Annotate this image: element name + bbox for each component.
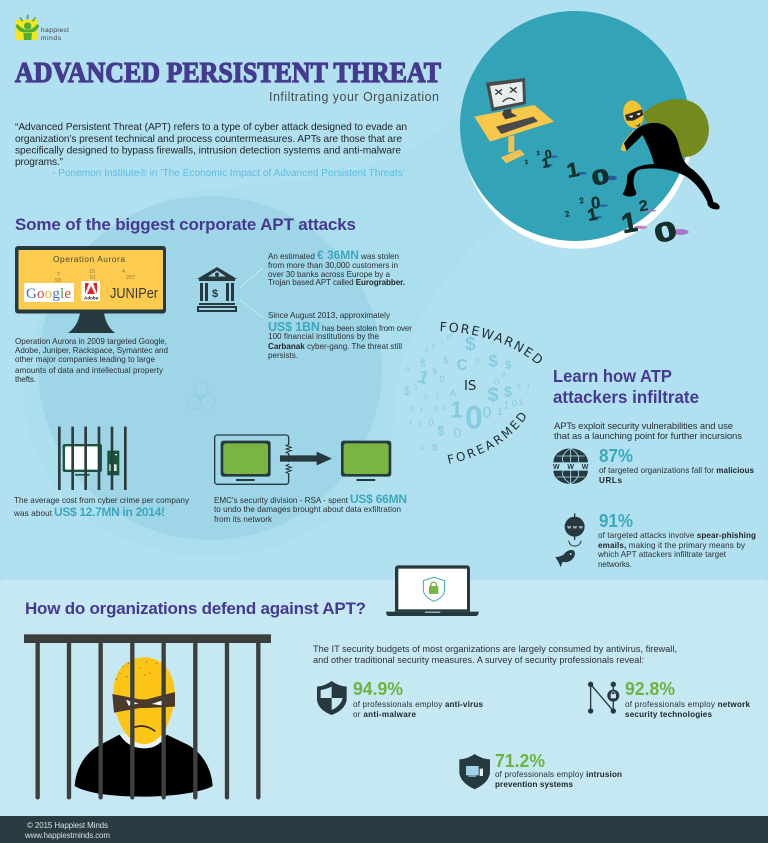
Aurora description: thefts. — [15, 375, 36, 384]
stat: 91%: 91% — [599, 511, 633, 531]
stat: Eurograbber: An estimated € 36MN was stolen — [268, 248, 399, 262]
falling digits: 2 — [564, 208, 571, 219]
graphic: forewarned is forearmed: A — [420, 445, 425, 452]
stat: 91% — [597, 511, 756, 569]
graphic: forewarned is forearmed: 4 — [425, 348, 429, 354]
icon: Operation Aurora monitor: 93 — [55, 278, 61, 284]
stat: Carbanak: US$ 1BN has been stolen from over — [268, 320, 412, 334]
graphic: forewarned is forearmed: 1 — [418, 420, 422, 429]
intro text: APTs exploit: APTs exploit security vulnerabilities and use — [554, 421, 733, 432]
intro text: APTs exploit: that as a launching point for further incursions — [554, 431, 742, 442]
graphic: forewarned is forearmed: 0 — [512, 399, 518, 410]
section heading: learn how: attackers infiltrate — [553, 387, 699, 407]
quote text block: - Ponemon Institute® in ‘The Economic Impact of Advanced Persistent Threats’ — [52, 168, 405, 179]
stat: EMC RSA: US$ 66MN — [350, 492, 407, 506]
icon: Operation Aurora monitor: 4 — [122, 269, 125, 275]
graphic: forewarned is forearmed: 0 — [424, 392, 429, 401]
graphic: forewarned is forearmed: 0 — [465, 399, 483, 435]
stat: average cost: was about — [13, 509, 53, 518]
stat: Carbanak — [268, 311, 412, 360]
intro text: APTs exploit — [554, 421, 742, 442]
graphic: forewarned is forearmed: $ — [420, 359, 426, 370]
icon: shield anti-virus — [317, 681, 347, 715]
intro text: security budgets: and other traditional security measures. A survey of security professionals reveal: — [313, 655, 644, 665]
falling digits: 1 — [565, 159, 581, 182]
logo: happiest — [41, 27, 69, 34]
quote text block: programs.” — [15, 157, 64, 168]
quote text block: “Advanced Persistent Threat (APT) refers to a type of cyber attack designed to evade an — [15, 122, 407, 133]
graphic: forewarned is forearmed: IS — [464, 379, 476, 394]
icon: network security — [588, 682, 619, 714]
stat: 94.9% — [353, 679, 483, 719]
falling digits: 2 — [536, 151, 541, 157]
graphic: forewarned is forearmed: 0 — [483, 404, 491, 421]
graphic: forewarned is forearmed: 1 — [497, 406, 503, 418]
falling digits: 1 — [541, 155, 551, 171]
stat: Eurograbber: from more than 30,000 customers in — [268, 261, 398, 270]
icon: Operation Aurora monitor: 257 — [126, 275, 135, 281]
graphic: forewarned is forearmed: 1 — [450, 396, 463, 422]
panel: defense section — [0, 565, 768, 816]
stat: Eurograbber — [268, 248, 405, 287]
graphic: forewarned is forearmed: 0 — [439, 375, 445, 386]
falling digits: 2 — [578, 195, 585, 206]
icon: Operation Aurora monitor: Google — [26, 286, 71, 302]
falling digits: 1 — [586, 204, 599, 225]
graphic: forewarned is forearmed: FOREARMED — [448, 412, 526, 464]
graphic: forewarned is forearmed: 1 — [527, 382, 531, 389]
stat: 87%: of targeted organizations fall for malicious — [599, 466, 754, 475]
icon: bank — [197, 267, 237, 312]
graphic: forewarned is forearmed: S — [432, 443, 438, 453]
stat: Carbanak: Carbanak cyber-gang. The threat still — [268, 342, 402, 351]
stat: Carbanak: 100 financial institutions by the — [268, 332, 379, 341]
icon: www globe: WWW — [553, 464, 589, 471]
icon: biohazard watermark — [187, 383, 215, 409]
icon: phishing hook and fish: www — [566, 525, 583, 530]
graphic: forewarned is forearmed: 1 — [440, 338, 444, 345]
stat: Carbanak: Since August 2013, approximately — [268, 311, 391, 320]
icon: shield with devices — [459, 754, 490, 789]
graphic: forewarned is forearmed: 0 — [502, 370, 506, 379]
graphic: forewarned is forearmed — [404, 322, 542, 464]
graphic: forewarned is forearmed: 0 — [428, 417, 434, 427]
icon: Operation Aurora monitor: 7 — [57, 272, 60, 278]
section heading: learn how — [553, 366, 699, 407]
thief figure — [621, 99, 720, 209]
title: ADVANCED PERSISTENT THREAT — [15, 58, 441, 89]
graphic: forewarned is forearmed: 0 — [433, 405, 437, 414]
icon: sack of data — [643, 99, 709, 157]
graphic: forewarned is forearmed: $ — [465, 334, 476, 355]
stat: 92.8%: security technologies — [625, 710, 712, 719]
graphic: forewarned is forearmed: $ — [488, 352, 498, 371]
icon: Operation Aurora monitor: 51 — [90, 275, 96, 281]
stat: 91%: of targeted attacks involve spear-phishing — [598, 531, 756, 540]
stat: 94.9%: or anti-malware — [353, 710, 416, 719]
stat: EMC RSA: from its network — [214, 515, 273, 524]
stat: 71.2%: of professionals employ intrusion — [495, 770, 622, 779]
subtitle: Infiltrating your Organization — [269, 90, 439, 104]
stat: 91%: emails, making it the primary means by — [598, 541, 746, 550]
graphic: forewarned is forearmed: $ — [443, 355, 449, 365]
falling digits: 1 — [619, 206, 640, 239]
stat: 92.8%: of professionals employ network — [625, 700, 750, 709]
stat: Carbanak: persists. — [268, 351, 298, 360]
footer: © 2015 Happiest Minds — [27, 821, 108, 830]
graphic: forewarned is forearmed: FOREWARNED — [440, 322, 542, 364]
stat: Eurograbber: over 30 banks across Europe by a — [268, 270, 390, 279]
falling digits: 0 — [651, 215, 680, 249]
icon: data exfiltration monitors — [215, 435, 391, 484]
quote text block: organization's present technical and process countermeasures. APTs are those that are — [15, 134, 402, 145]
quote text block: specifically designed to bypass firewalls, intrusion detection systems and anti-malware — [15, 146, 401, 156]
falling digits: 0 — [544, 147, 553, 162]
icon: broken computer on desk — [474, 78, 554, 163]
stat: 94.9%: of professionals employ anti-virus — [353, 700, 483, 709]
falling digits: 0 — [590, 164, 611, 190]
graphic: forewarned is forearmed: $ — [487, 384, 499, 407]
stat: Eurograbber: Trojan based APT called Eurograbber. — [268, 278, 405, 287]
graphic: forewarned is forearmed: $ — [437, 424, 444, 438]
icon: Operation Aurora monitor: JUNIPer — [110, 286, 158, 302]
illustration: thief behind bars — [24, 634, 271, 797]
logo: minds — [41, 35, 62, 42]
stat: average cost: The average cost from cyber crime per company — [14, 496, 190, 505]
graphic: forewarned is forearmed: $ — [504, 385, 512, 401]
graphic: forewarned is forearmed: C — [457, 357, 468, 374]
stat: 87% — [599, 446, 754, 485]
icon: bank: $ — [212, 288, 218, 300]
hero illustration: thief stealing data — [460, 11, 720, 249]
stat: 71.2%: prevention systems — [495, 780, 573, 789]
intro text: security budgets: The IT security budgets of most organizations are largely consumed by antivirus, firewall, — [313, 644, 677, 654]
stat: average cost — [13, 496, 190, 519]
graphic: forewarned is forearmed: s — [420, 408, 423, 414]
stat: 94.9%: 94.9% — [353, 679, 403, 699]
icon: Operation Aurora monitor — [15, 246, 166, 333]
footer: www.happiestminds.com — [24, 831, 110, 840]
icon: Operation Aurora monitor: Operation Aurora — [53, 254, 125, 264]
icon: jailed computer — [59, 427, 125, 490]
graphic: forewarned is forearmed: 8 — [447, 334, 451, 341]
stat: EMC RSA: EMC's security division - RSA - spent — [214, 496, 349, 505]
graphic: forewarned is forearmed: $ — [404, 384, 411, 398]
quote text block — [15, 122, 407, 179]
graphic: forewarned is forearmed: 0 — [517, 382, 521, 391]
Aurora description: other major companies leading to large — [15, 355, 155, 364]
graphic: forewarned is forearmed: 0 — [410, 404, 415, 414]
icon: phishing hook and fish — [555, 513, 585, 567]
logo — [15, 15, 69, 42]
graphic: forewarned is forearmed: 0 — [475, 356, 480, 365]
graphic: forewarned is forearmed: 0 — [432, 343, 436, 350]
Aurora description — [15, 337, 168, 384]
graphic: forewarned is forearmed: A — [449, 389, 456, 400]
stat: 87%: URLs — [599, 476, 622, 485]
graphic: forewarned is forearmed: 0 — [413, 382, 417, 391]
stat: 71.2% — [495, 751, 622, 789]
stat: 91%: networks. — [598, 560, 632, 569]
stat: 71.2%: 71.2% — [495, 751, 545, 771]
graphic: forewarned is forearmed: 1 — [518, 397, 523, 407]
graphic: forewarned is forearmed: 0 — [494, 377, 499, 387]
stat: EMC RSA — [214, 492, 407, 524]
graphic: forewarned is forearmed: 1 — [503, 399, 509, 411]
graphic: forewarned is forearmed: 0 — [405, 365, 409, 374]
graphic: forewarned is forearmed: $ — [433, 366, 438, 375]
graphic: forewarned is forearmed: 0 — [453, 424, 461, 440]
section heading: learn how: Learn how ATP — [553, 366, 672, 386]
stat: EMC RSA: to undo the damages brought about data exfiltration — [214, 505, 401, 514]
graphic: forewarned is forearmed: 1 — [415, 365, 432, 389]
intro text: security budgets — [313, 644, 677, 665]
section heading: corporate attacks: Some of the biggest corporate APT attacks — [15, 215, 356, 234]
falling digits — [524, 147, 689, 249]
stat: 92.8%: 92.8% — [625, 679, 675, 699]
falling digits: 2 — [524, 160, 530, 166]
heading: how do organizations defend: How do organizations defend against APT? — [25, 599, 366, 618]
graphic: forewarned is forearmed: 1 — [435, 391, 439, 400]
graphic: forewarned is forearmed: $ — [505, 359, 512, 371]
stat: 87%: 87% — [599, 446, 633, 466]
icon: www globe — [553, 448, 589, 484]
graphic: forewarned is forearmed: 0 — [442, 403, 446, 412]
icon: Operation Aurora monitor: 15 — [89, 269, 95, 275]
stat: 91%: which APT attackers infiltrate target — [597, 550, 727, 559]
Aurora description: amounts of data and intellectual property — [15, 366, 164, 375]
graphic: forewarned is forearmed: 0 — [450, 333, 454, 339]
falling digits: 2 — [638, 198, 650, 215]
icon: laptop with shield — [386, 565, 479, 616]
stat: 92.8% — [625, 679, 750, 719]
falling digits: 0 — [590, 193, 601, 213]
icon: Operation Aurora monitor: Adobe — [84, 296, 99, 300]
graphic: forewarned is forearmed: 1 — [408, 418, 412, 425]
Aurora description: Adobe, Juniper, Rackspace, Symantec and — [15, 346, 168, 355]
footer — [0, 816, 768, 843]
stat: average cost: US$ 12.7MN in 2014! — [54, 505, 165, 519]
Aurora description: Operation Aurora in 2009 targeted Google, — [15, 337, 167, 346]
